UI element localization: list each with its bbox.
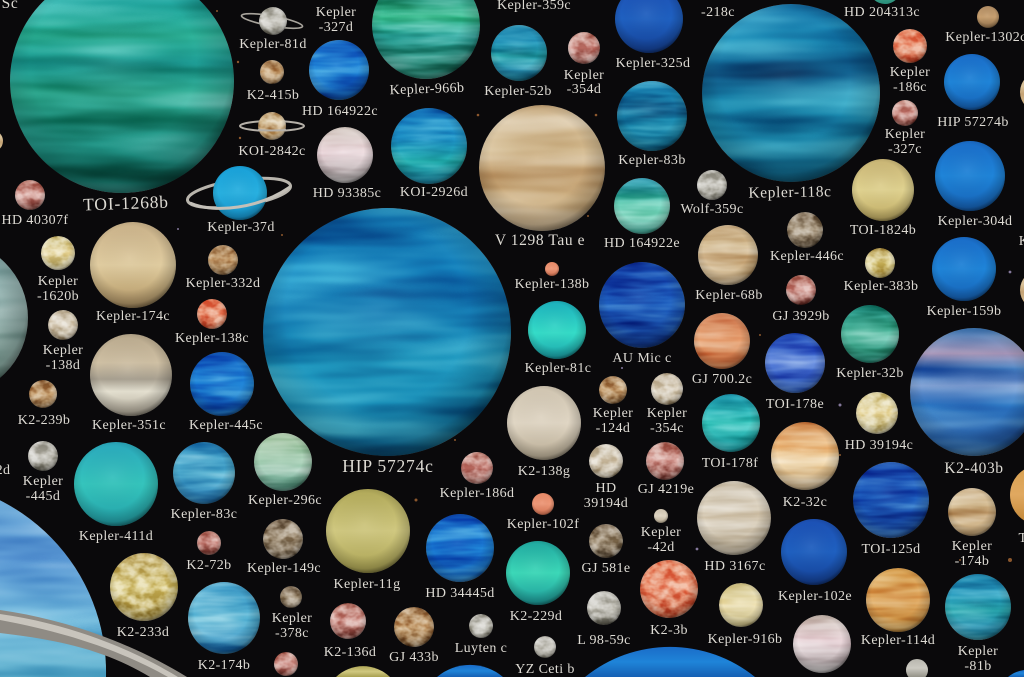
planet: Kepler-81c: Kepler-81c: [525, 361, 591, 376]
planet: Kepler-138d: Kepler: [43, 343, 83, 358]
planet: Kepler-445d: Kepler: [23, 474, 63, 489]
planet: Kepler-32b: [836, 305, 904, 381]
planet: K2-136d: [324, 603, 376, 660]
planet: TOI-178e: [765, 333, 825, 412]
planet: large bottom left with ring: [0, 480, 187, 677]
planet: Kepler-81d with ring: [239, 7, 307, 52]
planet: Kepler-186d: [440, 452, 514, 501]
planet: HD 93385c: HD 93385c: [313, 186, 381, 201]
planet: K2-403b: [910, 328, 1024, 477]
planet: Kepler-354c: Kepler: [647, 406, 687, 421]
planet: Kepler-383b: [844, 248, 918, 294]
planet: TOI-125d: [853, 462, 929, 557]
planet: Kepler-102e: Kepler-102e: [778, 589, 852, 604]
planet: HD 164922c: HD 164922c: [302, 104, 378, 119]
planet: left edge grey-blue: [0, 240, 28, 396]
planet: KOI-2842c with ring: [238, 112, 306, 159]
planet: top teal sliver: [869, 0, 901, 4]
planet: HD 3167c: HD 3167c: [704, 559, 766, 574]
planet: HIP 57274b: HIP 57274b: [937, 115, 1009, 130]
planet: Kepler-296c: [248, 433, 322, 508]
planet: K2-403b: K2-403b: [944, 460, 1004, 477]
planet: unnamed pink: [793, 615, 851, 673]
planet: HD 164922e: HD 164922e: [604, 236, 680, 251]
planet: right edge tan lower: [1020, 270, 1024, 310]
planet: Kepler-138b: [515, 262, 589, 292]
planet: Kepler-114d: Kepler-114d: [861, 633, 935, 648]
planet: GJ 4219e: [638, 442, 694, 497]
planet: HD 164922e: [604, 178, 680, 251]
planet: Kepler-296c: Kepler-296c: [248, 493, 322, 508]
planet: L 98-59c: L 98-59c: [577, 633, 631, 648]
label: -218c: -218c: [701, 5, 735, 20]
planet: Kepler-327c: -327c: [888, 142, 922, 157]
planet: K2-415b: K2-415b: [247, 88, 299, 103]
planet: Kepler-174b: -174b: [955, 554, 989, 569]
planet: HD 39194c: [845, 392, 913, 453]
planet: HD 39194c: HD 39194c: [845, 438, 913, 453]
planet: Kepler-378c: -378c: [275, 626, 309, 641]
planet: Kepler-83b: [617, 81, 687, 168]
planet: Kepler-186c: Kepler: [890, 65, 930, 80]
planet: Kepler-327c: Kepler: [885, 127, 925, 142]
planet: TOI-1824b: [850, 159, 916, 238]
planet: Kepler-332d: Kepler-332d: [186, 276, 260, 291]
planet: Kepler-124d: -124d: [596, 421, 630, 436]
planet: Kepler-354d: [564, 32, 604, 97]
planet: K2-136d: K2-136d: [324, 645, 376, 660]
planet: GJ 433b: [389, 607, 439, 665]
planet: K2-239b: [18, 380, 70, 428]
planet: Kepler-138c: Kepler-138c: [175, 331, 249, 346]
planet: Kepler-81b: Kepler: [958, 644, 998, 659]
planet: K2-3b: [640, 560, 698, 638]
planet: right edge orange: [1010, 465, 1024, 525]
planet: Kepler-81b: [945, 574, 1011, 674]
planet: Kepler-327c: [885, 100, 925, 157]
planet: Kepler-32b: Kepler-32b: [836, 366, 904, 381]
planet: Kepler-42d: [641, 509, 681, 555]
planet: Kepler-102f: Kepler-102f: [507, 517, 579, 532]
planet: Kepler-378c: Kepler: [272, 611, 312, 626]
planet: HD 40307f: HD 40307f: [2, 213, 68, 228]
planet: Kepler-445d: -445d: [26, 489, 60, 504]
planet: TOI-178f: [702, 394, 760, 471]
planet: Kepler-102f: [507, 493, 579, 532]
planet: small red bottom: [274, 652, 298, 676]
planet: GJ 700.2c: [692, 313, 752, 387]
planet: Kepler-354c: -354c: [650, 421, 684, 436]
planet: Kepler-325d: [615, 0, 690, 71]
planet: V 1298 Tau e: [479, 105, 605, 249]
planet: Kepler-83c: Kepler-83c: [171, 507, 237, 522]
planet: Kepler-966b: [372, 0, 480, 98]
planet: Kepler-83c: [171, 442, 237, 522]
planet: Kepler-124d: Kepler: [593, 406, 633, 421]
planet: TOI-1824b: TOI-1824b: [850, 223, 916, 238]
label: Kepler-327d: -327d: [319, 20, 353, 35]
planet: bottom blue small: [437, 665, 503, 677]
planet: Kepler-37d with ring: [186, 166, 292, 235]
planet: Kepler-445d: [23, 441, 63, 504]
planet: Kepler-149c: [247, 519, 321, 576]
planet: Kepler-916b: Kepler-916b: [708, 632, 782, 647]
planet: Kepler-149c: Kepler-149c: [247, 561, 321, 576]
planet: HD 40307f: [2, 180, 68, 228]
planet: bottom centre blue: [585, 647, 755, 677]
planet: Kepler-916b: [708, 583, 782, 647]
planet: Kepler-1620b: [37, 236, 79, 304]
planet: HD 34445d: HD 34445d: [425, 586, 495, 601]
planet: Kepler-354d: Kepler: [564, 68, 604, 83]
planet: HD 3167c: [697, 481, 771, 574]
planet: Kepler-138b: Kepler-138b: [515, 277, 589, 292]
planet: K2-415b: [247, 60, 299, 103]
planet: Kepler-325d: Kepler-325d: [616, 56, 690, 71]
planet: Kepler-354c: [647, 373, 687, 436]
planet: Kepler-118c: Kepler-118c: [748, 183, 832, 202]
planet: V 1298 Tau e: V 1298 Tau e: [495, 232, 585, 249]
planet: Kepler-411d: Kepler-411d: [79, 529, 153, 544]
planet: HD 164922c: [302, 40, 378, 119]
planet: K2-174b: K2-174b: [198, 658, 250, 673]
planet: Kepler-446c: [770, 212, 844, 264]
planet: K2-229d: K2-229d: [510, 609, 562, 624]
planet: Kepler-102e: [778, 519, 852, 604]
planet: Kepler-81d with ring: Kepler-81d: [239, 37, 307, 52]
planet: KOI-2926d: [391, 108, 468, 200]
planet: HIP 57274c: [263, 208, 511, 476]
planet: K2-138g: [507, 386, 581, 479]
planet: K2-32c: [771, 422, 839, 510]
planet: GJ 3929b: [772, 275, 830, 324]
planet: Kepler-186c: [890, 29, 930, 95]
planet: Kepler-174b: [948, 488, 996, 569]
planet: Wolf-359c: Wolf-359c: [680, 202, 744, 217]
planet: Kepler-351c: [90, 334, 172, 433]
planet: TOI-178e: TOI-178e: [766, 397, 824, 412]
planet: AU Mic c: AU Mic c: [612, 351, 672, 366]
planet: TOI-1268b: TOI-1268b: [83, 192, 169, 214]
planet: GJ 581e: GJ 581e: [581, 561, 631, 576]
planet: Kepler-351c: Kepler-351c: [92, 418, 166, 433]
planet: TOI-178f: TOI-178f: [702, 456, 758, 471]
planet: Kepler-174c: [90, 222, 176, 324]
planet: Kepler-11g: [326, 489, 410, 592]
planet: Kepler-354d: -354d: [567, 82, 601, 97]
planet: Kepler-159b: Kepler-159b: [927, 304, 1001, 319]
planet: Kepler-68b: Kepler-68b: [695, 288, 763, 303]
planet: HD 93385c: [313, 127, 381, 201]
planet: Kepler-445c: Kepler-445c: [189, 418, 263, 433]
planet: Kepler-1620b: Kepler: [38, 274, 78, 289]
label: Kepler-327d: Kepler: [316, 5, 356, 20]
planet: right edge tan upper: [1020, 72, 1024, 112]
planet: Kepler-159b: [927, 237, 1001, 319]
planet: Kepler-52b: [484, 25, 552, 99]
planet: Kepler-138d: -138d: [46, 358, 80, 373]
planet: KOI-2926d: KOI-2926d: [400, 185, 468, 200]
planet: Kepler-445c: [189, 352, 263, 433]
planet: Kepler-138d: [43, 310, 83, 373]
planet: bottom right blue: [1008, 670, 1024, 677]
planet: K2-229d: [506, 541, 570, 624]
planet: Kepler-37d with ring: Kepler-37d: [207, 220, 275, 235]
planet: L 98-59c: [577, 591, 631, 648]
planet: Kepler-446c: Kepler-446c: [770, 249, 844, 264]
planet: Kepler-304d: Kepler-304d: [938, 214, 1012, 229]
planet: HD 39194d: HD: [595, 481, 617, 496]
planet: K2-3b: K2-3b: [650, 623, 688, 638]
planet: K2-32c: K2-32c: [783, 495, 827, 510]
planet: Kepler-124d: [593, 376, 633, 436]
planet: Kepler-1620b: -1620b: [37, 289, 79, 304]
planet: GJ 700.2c: GJ 700.2c: [692, 372, 752, 387]
label: Kepler-327d: [316, 5, 356, 35]
planet: unnamed grey: [906, 659, 928, 677]
planet: HD 39194d: 39194d: [584, 496, 628, 511]
planet: K2-233d: K2-233d: [117, 625, 169, 640]
label: HD 204313c: HD 204313c: [844, 5, 920, 20]
planet: Kepler-83b: Kepler-83b: [618, 153, 686, 168]
planet: Kepler-42d: Kepler: [641, 525, 681, 540]
planet: K2-174b: [188, 582, 260, 673]
planet: Kepler-81b: -81b: [964, 659, 992, 674]
planet: Luyten c: Luyten c: [455, 641, 507, 656]
planet: HD 39194d: [584, 444, 628, 511]
planet: bottom yellow small: [336, 666, 390, 677]
planet: Kepler-174b: Kepler: [952, 539, 992, 554]
planet: Kepler-1302: [945, 6, 1024, 45]
planet: K2-72b: K2-72b: [186, 558, 232, 573]
planet: Wolf-359c: [680, 170, 744, 217]
planet: Kepler-383b: Kepler-383b: [844, 279, 918, 294]
planet: Kepler-378c: [272, 586, 312, 641]
planet: Kepler-186d: Kepler-186d: [440, 486, 514, 501]
planet: Kepler-114d: [861, 568, 935, 648]
planet: Luyten c: [455, 614, 507, 656]
planet: Kepler-332d: [186, 245, 260, 291]
planet: Kepler-42d: -42d: [647, 540, 675, 555]
planet: AU Mic c: [599, 262, 685, 366]
planet: GJ 433b: GJ 433b: [389, 650, 439, 665]
planet: GJ 4219e: GJ 4219e: [638, 482, 694, 497]
planet: HIP 57274c: HIP 57274c: [342, 456, 434, 476]
planet: GJ 581e: [581, 524, 631, 576]
planet: GJ 3929b: GJ 3929b: [772, 309, 830, 324]
planet: KOI-2842c with ring: KOI-2842c: [238, 144, 306, 159]
planet: Kepler-304d: [935, 141, 1012, 229]
planet: TOI-1268b: [10, 0, 234, 214]
planet: Kepler-52b: Kepler-52b: [484, 84, 552, 99]
planet: Kepler-174c: Kepler-174c: [96, 309, 170, 324]
planet: K2-138g: K2-138g: [518, 464, 570, 479]
planet: Kepler-68b: [695, 225, 763, 303]
planet: K2-239b: K2-239b: [18, 413, 70, 428]
planet: HD 34445d: [425, 514, 495, 601]
planet: K2-72b: [186, 531, 232, 573]
planet: Kepler-186c: -186c: [893, 80, 927, 95]
planet: Kepler-118c: [702, 4, 880, 202]
planet: YZ Ceti b: [515, 636, 575, 677]
planet: TOI-125d: TOI-125d: [862, 542, 920, 557]
planet: Kepler-81c: [525, 301, 591, 376]
planet: Kepler-966b: Kepler-966b: [389, 81, 465, 98]
planet: HIP 57274b: [937, 54, 1009, 130]
planet: Kepler-138c: [175, 299, 249, 346]
planet: Kepler-11g: Kepler-11g: [334, 577, 400, 592]
planet: Kepler-411d: [74, 442, 158, 544]
planet: YZ Ceti b: YZ Ceti b: [515, 662, 575, 677]
planet: left edge tan: [0, 130, 3, 152]
planet: K2-233d: [110, 553, 178, 640]
